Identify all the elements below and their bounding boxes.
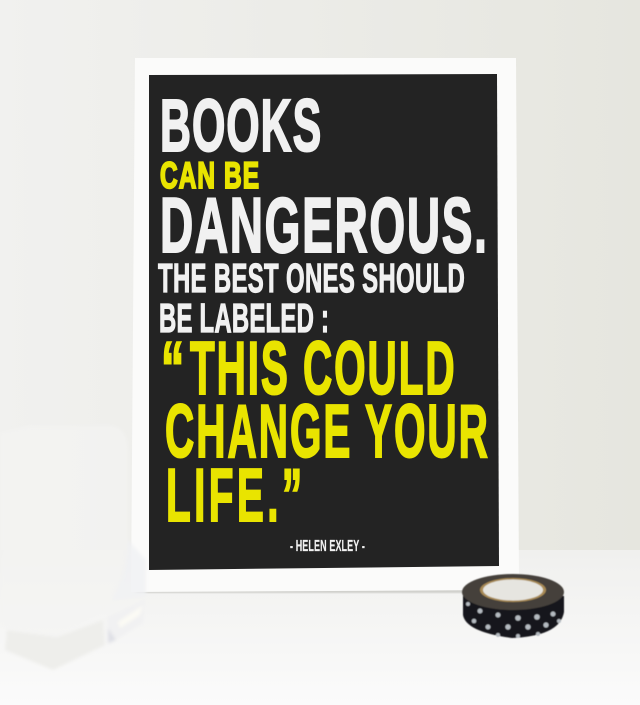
subhead: CAN BE: CAN BE	[160, 155, 259, 196]
text: THE BEST ONES SHOULD: THE BEST ONES SHOULD	[158, 257, 465, 302]
quote line 1	[161, 326, 455, 411]
opening quote mark: “	[161, 328, 184, 411]
white picture frame	[131, 58, 519, 592]
wall	[0, 0, 640, 552]
quote line 3: LIFE.”	[166, 453, 302, 537]
text: BE LABELED: BE LABELED :	[159, 297, 329, 342]
headline: BOOKS: BOOKS	[160, 84, 321, 167]
headline: DANGEROUS.: DANGEROUS.	[160, 181, 487, 269]
quote line 2: CHANGE YOUR	[165, 389, 488, 473]
icon: washi tape roll	[462, 574, 564, 638]
THIS COULD: THIS COULD	[190, 326, 455, 410]
table surface	[0, 550, 640, 705]
polka dots	[466, 602, 561, 638]
attribution: - HELEN EXLEY -	[290, 538, 365, 555]
frame shadow	[136, 588, 516, 593]
poster	[149, 74, 499, 570]
icon: glass candle holder	[0, 426, 146, 670]
